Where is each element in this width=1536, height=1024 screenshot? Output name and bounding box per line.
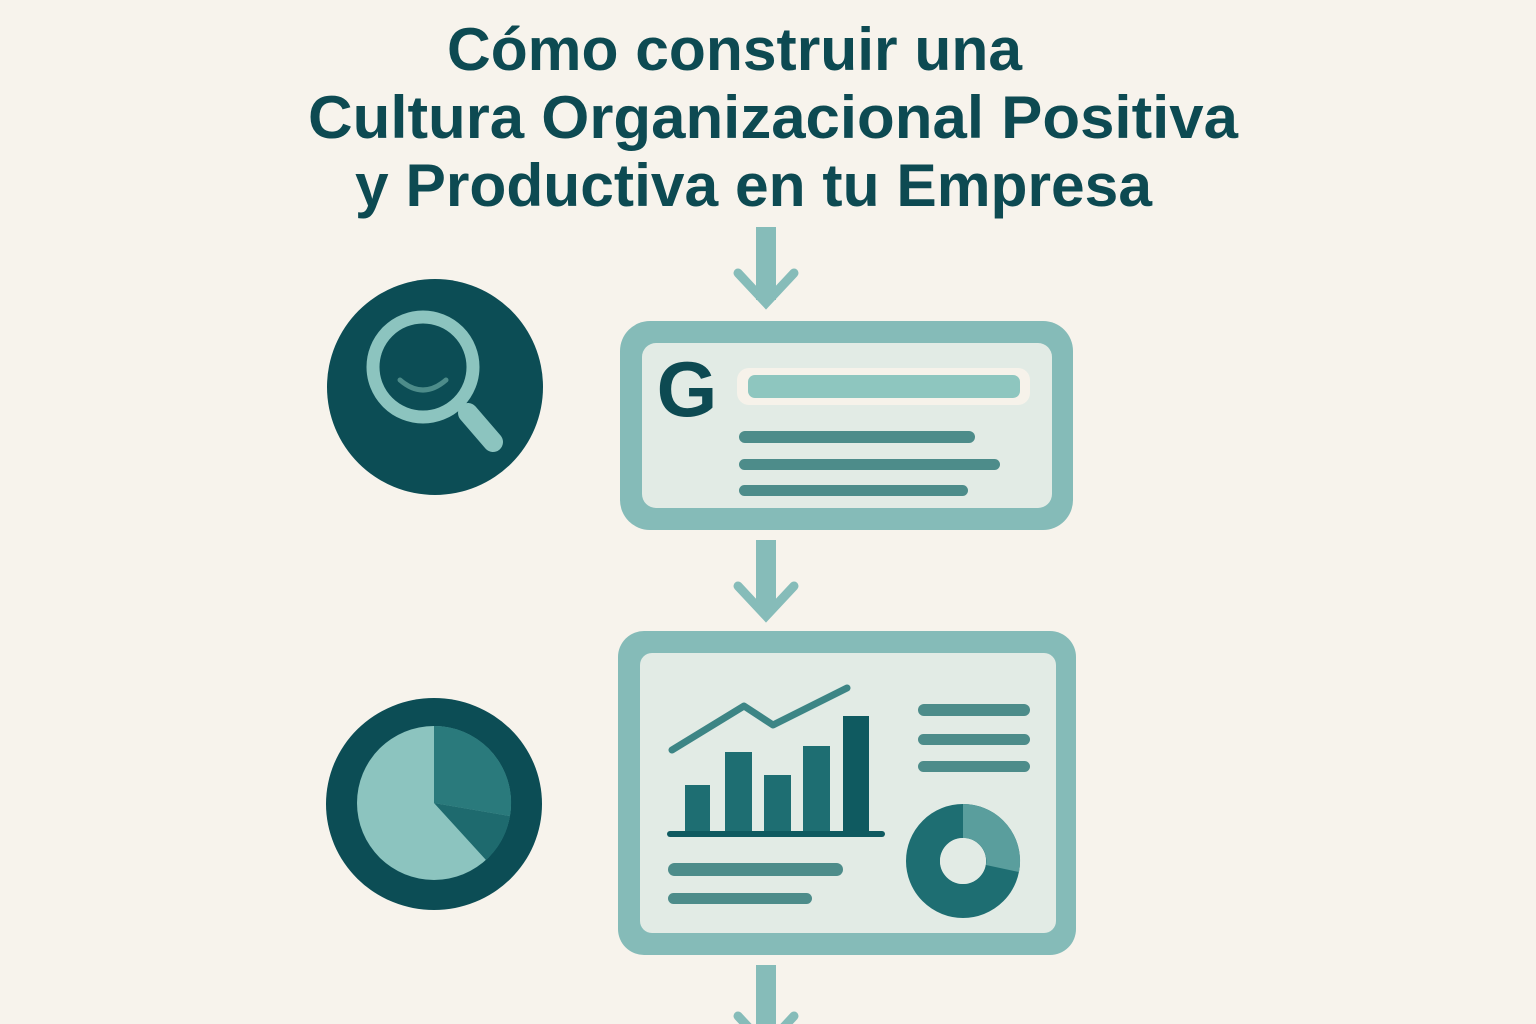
title: Cómo construir una — [447, 16, 1023, 83]
title: Cultura Organizacional Positiva — [308, 84, 1239, 151]
bar chart — [667, 716, 885, 837]
title — [308, 16, 1239, 219]
panel: dashboard — [618, 631, 1076, 955]
donut chart — [923, 804, 1020, 901]
icon: pie chart circle — [326, 698, 542, 910]
arrow: title to card — [738, 227, 794, 303]
icon: G logo: G — [657, 345, 717, 433]
line chart — [672, 688, 847, 750]
panel: search card — [620, 321, 1073, 530]
title: y Productiva en tu Empresa — [355, 152, 1153, 219]
icon: magnifier circle — [327, 279, 543, 495]
text lines — [668, 704, 1030, 904]
arrow: card to dashboard — [738, 540, 794, 616]
arrow: bottom — [738, 965, 794, 1024]
